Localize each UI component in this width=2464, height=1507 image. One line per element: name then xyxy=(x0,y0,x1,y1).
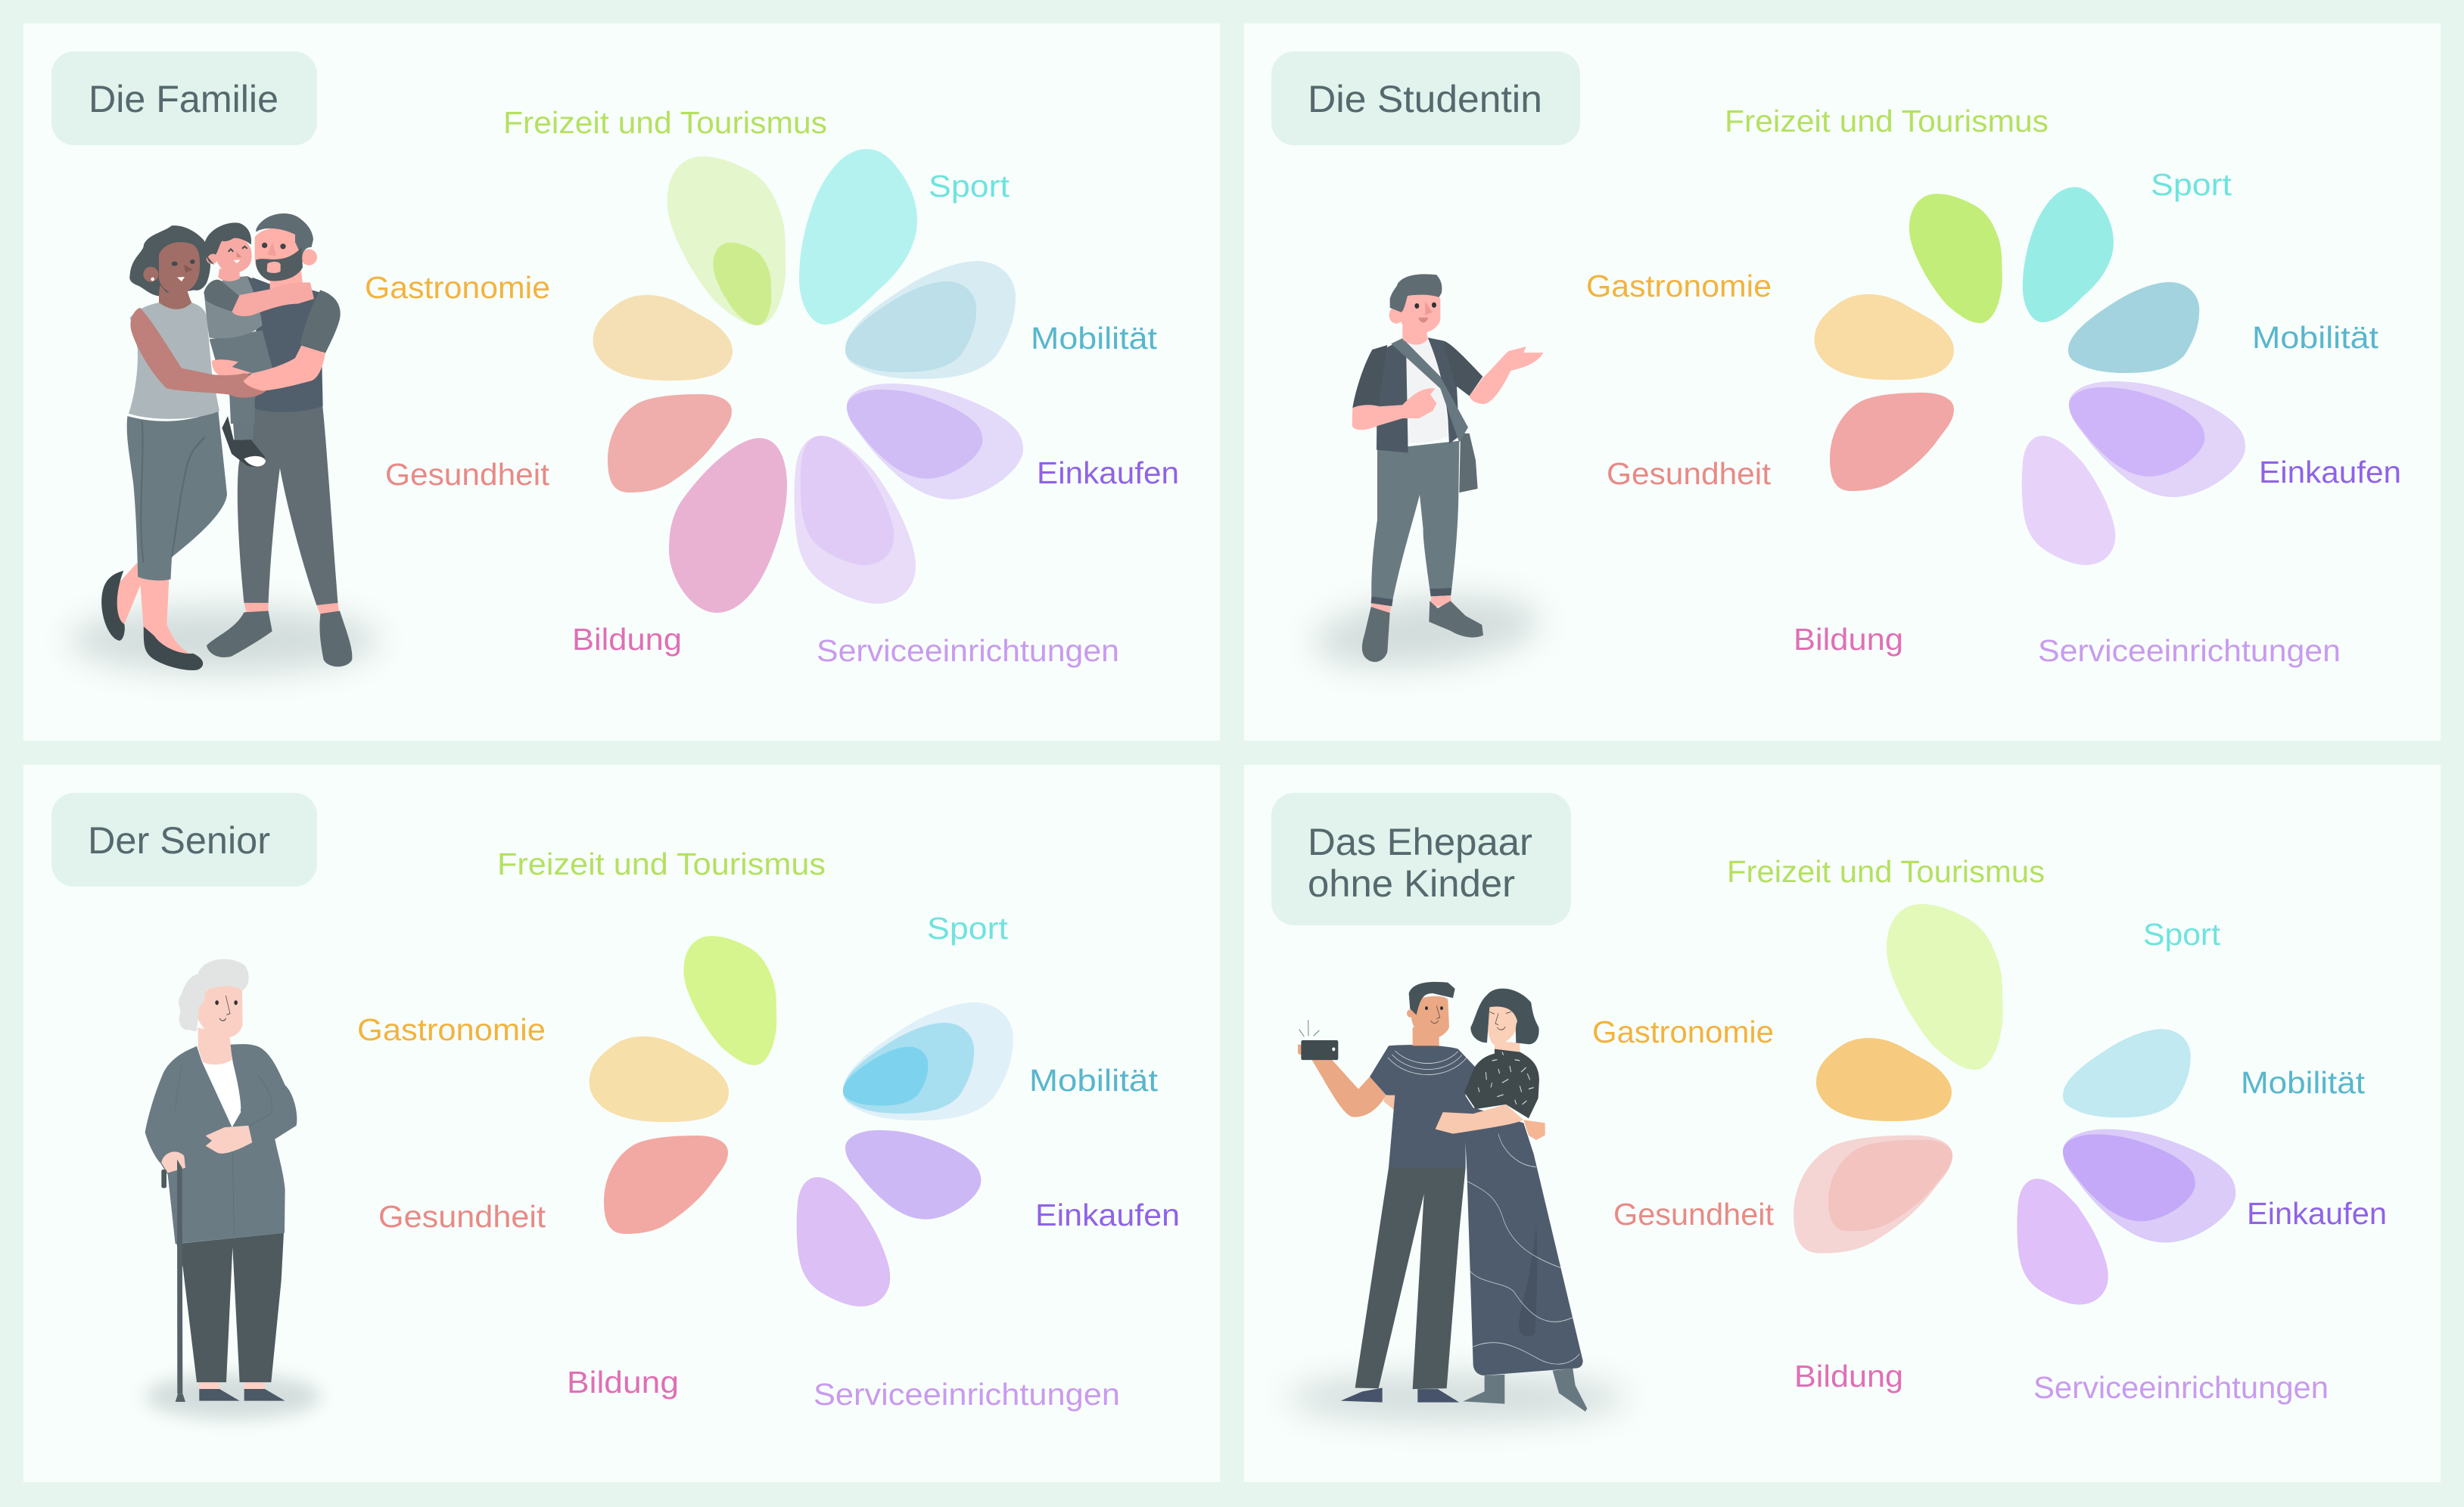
title pill: Das Ehepaar ohne Kinder: ohne Kinder xyxy=(1308,862,1515,905)
petal: Sport xyxy=(2023,187,2114,322)
labels: Das Ehepaar ohne Kinder: Mobilität xyxy=(2241,1065,2366,1100)
labels: Der Senior: Mobilität xyxy=(1029,1063,1159,1098)
labels: Die Familie: Gesundheit xyxy=(385,457,550,492)
petal: Serviceeinrichtungen xyxy=(795,436,916,604)
labels: Die Studentin: Sport xyxy=(2151,167,2232,202)
title pill: Die Familie xyxy=(51,51,317,145)
labels: Der Senior: Serviceeinrichtungen xyxy=(814,1377,1120,1412)
labels: Der Senior: Freizeit und Tourismus xyxy=(497,847,826,881)
petal: Bildung xyxy=(669,438,787,613)
labels: Der Senior xyxy=(357,847,1180,1412)
flower chart: Die Familie xyxy=(593,149,1023,613)
labels: Die Studentin xyxy=(1586,104,2401,668)
labels: Die Familie: Gastronomie xyxy=(365,270,550,305)
labels: Die Studentin: Mobilität xyxy=(2252,320,2379,355)
labels: Der Senior: Bildung xyxy=(567,1365,679,1400)
petal: Gesundheit xyxy=(608,394,732,492)
labels: Die Familie: Sport xyxy=(929,169,1010,204)
illustration: family xyxy=(69,213,379,673)
labels: Die Studentin: Einkaufen xyxy=(2259,455,2401,489)
petal: Mobilitaet xyxy=(2063,1029,2191,1117)
petal: Freizeit und Tourismus xyxy=(667,157,786,325)
petal: Einkaufen xyxy=(847,384,1023,499)
panel: Das Ehepaar ohne Kinder xyxy=(1244,765,2441,1482)
labels: Das Ehepaar ohne Kinder: Serviceeinrichtungen xyxy=(2033,1370,2329,1405)
labels: Die Familie: Serviceeinrichtungen xyxy=(817,633,1119,668)
labels: Die Familie: Bildung xyxy=(572,622,682,657)
title pill: Der Senior: Der Senior xyxy=(88,819,270,862)
petal: Serviceeinrichtungen xyxy=(2022,436,2115,565)
labels: Das Ehepaar ohne Kinder: Sport xyxy=(2143,917,2221,952)
petal: Gastronomie xyxy=(1815,294,1954,380)
labels: Die Studentin: Gastronomie xyxy=(1586,269,1772,303)
labels: Die Studentin: Bildung xyxy=(1794,622,1903,657)
title pill: Die Studentin: Die Studentin xyxy=(1308,78,1542,120)
flower chart: Die Studentin xyxy=(1815,187,2245,565)
labels: Das Ehepaar ohne Kinder: Gastronomie xyxy=(1592,1015,1774,1049)
petal: Sport xyxy=(799,149,917,325)
labels: Die Studentin: Freizeit und Tourismus xyxy=(1725,104,2049,138)
petal: Gastronomie xyxy=(590,1036,729,1122)
petal: Gesundheit xyxy=(1830,393,1954,491)
petal: Freizeit und Tourismus xyxy=(1887,904,2002,1070)
petal: Einkaufen xyxy=(2069,381,2245,497)
labels: Der Senior: Sport xyxy=(927,911,1009,946)
petal: Serviceeinrichtungen xyxy=(797,1177,890,1307)
illustration: couple xyxy=(1286,982,1627,1422)
petal: Mobilitaet xyxy=(845,261,1016,379)
labels: Die Familie xyxy=(365,105,1179,668)
flower chart: Das Ehepaar ohne Kinder xyxy=(1794,904,2235,1304)
labels: Das Ehepaar ohne Kinder: Einkaufen xyxy=(2247,1196,2387,1231)
labels: Der Senior: Einkaufen xyxy=(1035,1198,1180,1232)
petal: Gesundheit xyxy=(604,1136,728,1234)
panel: Die Studentin xyxy=(1244,23,2441,741)
labels: Die Studentin: Serviceeinrichtungen xyxy=(2038,633,2341,668)
title pill: Der Senior xyxy=(51,793,317,887)
petal: Gastronomie xyxy=(1816,1038,1952,1121)
labels: Das Ehepaar ohne Kinder xyxy=(1592,854,2387,1405)
petal: Einkaufen xyxy=(845,1130,981,1220)
labels: Das Ehepaar ohne Kinder: Bildung xyxy=(1794,1359,1903,1394)
title pill: Die Familie: Die Familie xyxy=(89,78,278,120)
title pill: Das Ehepaar ohne Kinder: Das Ehepaar xyxy=(1308,821,1532,863)
flower chart: Der Senior xyxy=(590,936,1013,1307)
labels: Das Ehepaar ohne Kinder: Gesundheit xyxy=(1613,1197,1775,1232)
petal: Gesundheit xyxy=(1794,1136,1952,1254)
panel: Die Familie xyxy=(23,23,1220,741)
labels: Die Familie: Freizeit und Tourismus xyxy=(503,105,827,140)
labels: Die Studentin: Gesundheit xyxy=(1607,456,1772,491)
labels: Das Ehepaar ohne Kinder: Freizeit und Tourismus xyxy=(1727,854,2045,889)
title pill: Die Studentin xyxy=(1271,51,1580,145)
panel: Der Senior xyxy=(23,765,1220,1482)
petal: Freizeit und Tourismus xyxy=(683,936,776,1065)
labels: Der Senior: Gastronomie xyxy=(357,1012,546,1047)
petal: Freizeit und Tourismus xyxy=(1909,194,2002,323)
title pill: Das Ehepaar ohne Kinder xyxy=(1271,793,1571,925)
illustration: student xyxy=(1310,274,1543,676)
labels: Die Familie: Einkaufen xyxy=(1037,455,1179,490)
petal: Mobilitaet xyxy=(2068,282,2199,373)
labels: Die Familie: Mobilität xyxy=(1031,321,1158,356)
petal: Gastronomie xyxy=(593,295,733,381)
petal: Mobilitaet xyxy=(843,1002,1013,1120)
petal: Einkaufen xyxy=(2063,1129,2235,1243)
illustration: senior xyxy=(145,959,321,1419)
petal: Serviceeinrichtungen xyxy=(2017,1179,2108,1304)
labels: Der Senior: Gesundheit xyxy=(378,1199,546,1234)
